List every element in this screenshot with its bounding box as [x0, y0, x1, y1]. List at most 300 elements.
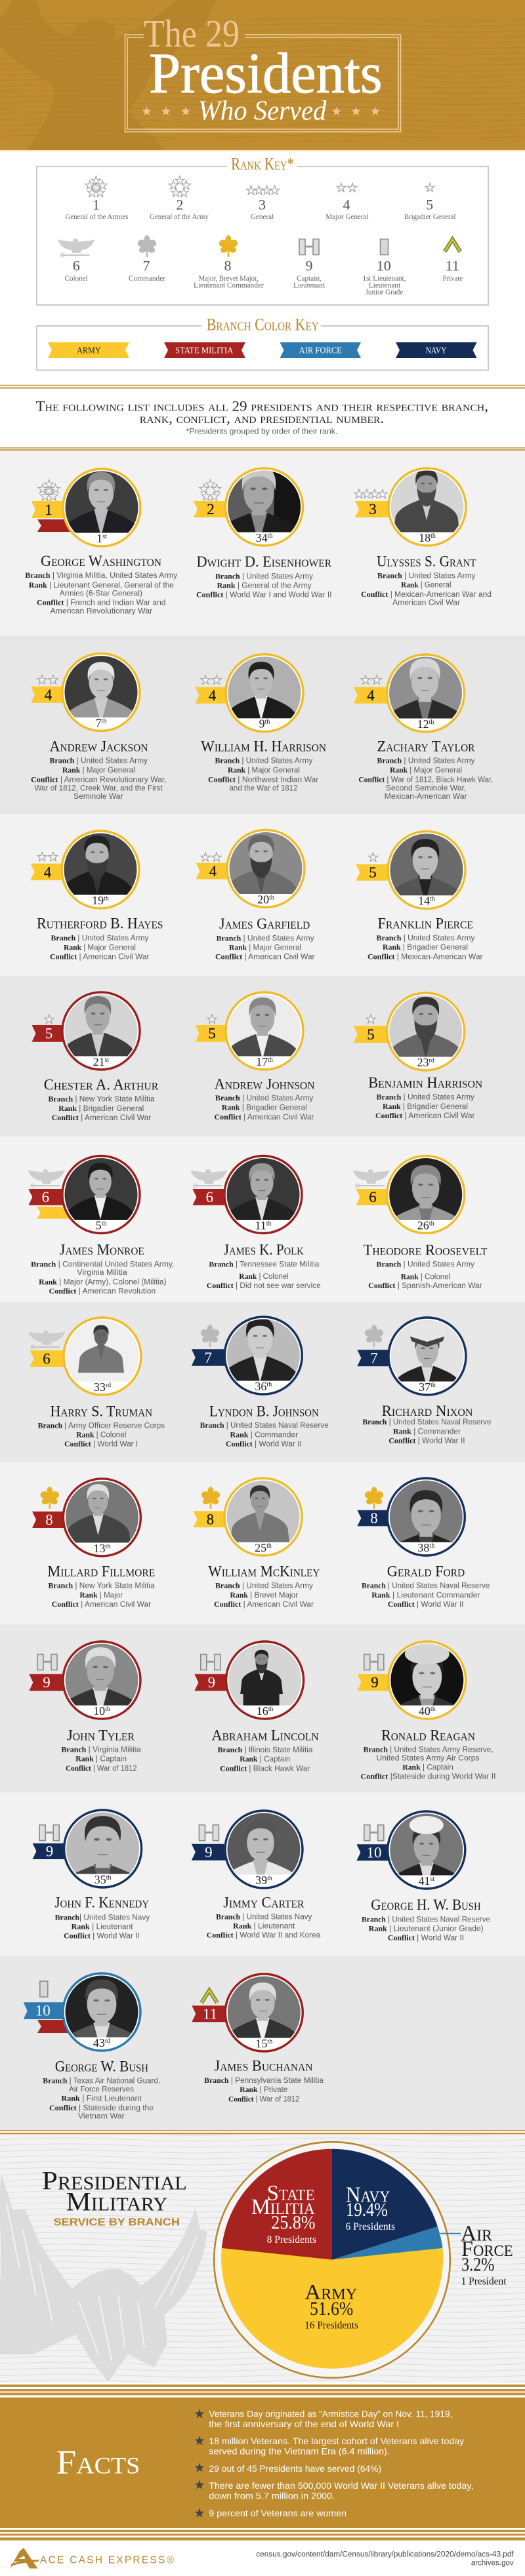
- card: Andrew Johnson: [196, 992, 315, 1121]
- rank 8: 8: [224, 258, 231, 274]
- air force ribbon: [280, 342, 361, 358]
- name: Benjamin Harrison: [368, 1075, 483, 1091]
- state militia ribbon: STATE MILITIA: [175, 346, 234, 355]
- portrait: [224, 1478, 303, 1556]
- details: [361, 1746, 496, 1781]
- details: Conflict | American Civil War: [214, 1114, 314, 1121]
- details: Rank | Lieutenant Commander: [371, 1592, 480, 1600]
- details: Conflict | War of 1812: [228, 2095, 299, 2103]
- card: John Tyler: [29, 1641, 146, 1773]
- rank 8: [194, 235, 264, 290]
- portrait: th: [265, 719, 270, 726]
- heading: facts: Facts: [56, 2444, 140, 2482]
- rank 2: [150, 176, 209, 221]
- rank oak leaf: [201, 1486, 220, 1508]
- branch ribbon: [357, 1350, 392, 1367]
- portrait: 33: [94, 1380, 106, 1394]
- details: Rank | Colonel: [76, 1432, 126, 1439]
- details: [361, 572, 492, 607]
- card: Gerald Ford: [357, 1478, 490, 1609]
- details: Rank | Brigadier General: [58, 1105, 144, 1113]
- details: Conflict | American Civil War: [50, 954, 150, 961]
- name: Abraham Lincoln: [211, 1727, 319, 1743]
- details: Conflict | French and Indian War and: [37, 599, 165, 607]
- details: Rank | Lieutenant: [72, 1923, 133, 1931]
- portrait: 10: [93, 1704, 105, 1718]
- details: [358, 757, 493, 801]
- details: Branch | United States Army: [51, 935, 149, 942]
- portrait: [386, 992, 466, 1072]
- branch ribbon: [355, 501, 392, 517]
- portrait: th: [266, 1220, 272, 1228]
- rank 4: 4: [343, 197, 350, 212]
- pie chart: [214, 2142, 513, 2378]
- portrait: th: [267, 2038, 272, 2045]
- portrait: [386, 653, 466, 733]
- details: Branch | New York State Militia: [49, 1582, 155, 1590]
- intro text: *Presidents grouped by order of their rank.: [186, 428, 337, 436]
- rank star: [207, 1015, 217, 1024]
- details: Rank | Major: [79, 1592, 123, 1600]
- card: Ulysses S. Grant: [354, 468, 492, 607]
- panel: rank key: [37, 155, 488, 305]
- rank 2: General of the Army: [150, 212, 209, 221]
- branch ribbon: [32, 1512, 67, 1528]
- portrait: [388, 468, 467, 546]
- portrait: [62, 1478, 141, 1557]
- portrait: th: [430, 1706, 436, 1713]
- portrait: 16: [257, 1704, 268, 1718]
- details: [368, 1261, 482, 1290]
- details: Conflict | World War I and World War II: [196, 591, 332, 599]
- card: James Buchanan: [192, 1973, 324, 2103]
- label: air force: [440, 2222, 513, 2287]
- intro text: [36, 398, 488, 436]
- fact 1: the first anniversary of the end of World War I: [209, 2419, 399, 2429]
- portrait: 43: [93, 2036, 105, 2049]
- portrait: th: [104, 895, 109, 902]
- rank 1: [66, 176, 129, 221]
- details: [200, 1422, 329, 1449]
- branch ribbon: [30, 1350, 66, 1367]
- details: Conflict | American Civil War: [52, 1114, 151, 1122]
- portrait: 34: [256, 531, 268, 544]
- label: state militia: [251, 2181, 316, 2245]
- name: Lyndon B. Johnson: [209, 1403, 319, 1419]
- title stars: [142, 106, 380, 115]
- portrait: th: [268, 1706, 273, 1713]
- details: Branch | Virginia Militia: [61, 1746, 141, 1754]
- portrait: 23: [417, 1056, 429, 1069]
- branch ribbon: 7: [205, 1350, 212, 1366]
- panel: facts: [0, 2385, 525, 2541]
- name: George H. W. Bush: [371, 1897, 481, 1913]
- details: American Civil War: [392, 599, 460, 607]
- portrait: [54, 1641, 146, 1743]
- details: [362, 1419, 491, 1445]
- branch ribbon: [193, 1511, 228, 1528]
- details: Conflict | World War I: [64, 1441, 138, 1449]
- label: state militia: State: [267, 2181, 315, 2205]
- details: Conflict | World War II: [388, 1934, 464, 1942]
- footer sources: archives.gov: [471, 2559, 514, 2567]
- portrait: th: [429, 1542, 434, 1550]
- details: Branch| United States Navy: [55, 1914, 150, 1922]
- details: [204, 2077, 324, 2103]
- portrait: rd: [106, 1382, 111, 1389]
- name: John F. Kennedy: [54, 1895, 150, 1911]
- rank stars: [361, 675, 381, 684]
- details: Branch | United States Army Reserve,: [364, 1746, 494, 1754]
- name: James Garfield: [219, 916, 310, 932]
- details: Conflict | Mexican-American War and: [361, 591, 492, 599]
- card: Lyndon B. Johnson: [192, 1316, 329, 1449]
- branch ribbon: 8: [207, 1511, 214, 1528]
- name: Gerald Ford: [387, 1563, 465, 1579]
- details: Conflict | War of 1812, Black Hawk War,: [358, 776, 493, 784]
- branch ribbon: 4: [45, 687, 52, 703]
- rank stars: [201, 675, 221, 684]
- title: Who Served: Who Served: [198, 96, 327, 127]
- intro text: rank, conflict, and presidential number.: [140, 410, 384, 426]
- portrait: 12: [417, 717, 429, 731]
- card: Jimmy Carter: [192, 1810, 321, 1939]
- rank stars: [37, 853, 58, 861]
- details: American Revolutionary War: [50, 607, 152, 615]
- details: Branch | United States Army: [215, 757, 313, 765]
- portrait: th: [267, 1875, 272, 1882]
- branch ribbon: [31, 687, 66, 703]
- portrait: th: [430, 896, 435, 903]
- details: Branch | United States Naval Reserve: [362, 1916, 490, 1923]
- rank 1: 1: [93, 197, 100, 212]
- label: air force: 3.2%: [461, 2254, 495, 2276]
- rank star: [45, 1015, 54, 1024]
- rank 1: General of the Armies: [66, 212, 129, 221]
- details: United States Army Air Corps: [377, 1754, 480, 1762]
- portrait: [384, 1811, 469, 1914]
- portrait: [223, 1156, 303, 1244]
- details: Conflict | World War II: [388, 1437, 465, 1445]
- fact 2: served during the Vietnam Era (6.4 million).: [209, 2446, 390, 2457]
- details: [43, 2078, 160, 2121]
- air force ribbon: AIR FORCE: [299, 346, 342, 355]
- branch ribbon: [192, 1844, 228, 1861]
- heading: rank key: Rank Key*: [231, 155, 294, 173]
- details: [368, 935, 483, 961]
- details: [61, 1746, 141, 1773]
- rank eagle: [28, 1169, 65, 1188]
- card: Dwight D. Eisenhower: [194, 467, 332, 599]
- branch ribbon: 4: [209, 687, 217, 704]
- fact 4: There are fewer than 500,000 World War II Veterans alive today,: [209, 2480, 473, 2491]
- branch ribbons: [28, 1189, 72, 1218]
- card: Chester A. Arthur: [32, 992, 159, 1122]
- details: Conflict | American Civil War: [52, 1601, 151, 1609]
- details: Branch | United States Army: [377, 572, 476, 580]
- branch ribbon: 6: [369, 1189, 377, 1205]
- rank star: [368, 853, 378, 862]
- branch ribbon: 2: [207, 501, 215, 517]
- card: James Monroe: [28, 1156, 174, 1296]
- details: Conflict | World War II: [388, 1601, 464, 1609]
- rank star: [366, 1015, 375, 1024]
- details: Air Force Reserves: [69, 2085, 134, 2093]
- card: William H. Harrison: [196, 654, 326, 792]
- portrait: [226, 829, 306, 909]
- portrait: [224, 1316, 303, 1396]
- portrait: [215, 1810, 306, 1915]
- heading: presidential military: SERVICE BY BRANCH: [54, 2217, 180, 2228]
- portrait: th: [105, 1706, 110, 1713]
- details: Conflict | World War II and Korea: [207, 1931, 321, 1939]
- branch ribbon: 9: [371, 1674, 379, 1691]
- portrait: 26: [417, 1218, 429, 1232]
- name: Zachary Taylor: [377, 738, 475, 754]
- footer sources: [256, 2551, 514, 2567]
- details: Branch | United States Army: [50, 757, 148, 765]
- branch ribbon: [196, 863, 230, 879]
- card: Ronald Reagan: [357, 1641, 496, 1781]
- branch ribbons: 6: [42, 1189, 49, 1205]
- rank 10: 1st Lieutenant,: [363, 273, 406, 283]
- details: Conflict | Black Hawk War: [220, 1765, 310, 1773]
- details: [214, 1582, 314, 1609]
- rank oak leaf: [365, 1325, 383, 1347]
- portrait: [62, 652, 141, 732]
- branch ribbon: 6: [43, 1351, 51, 1367]
- card: Benjamin Harrison: [354, 992, 483, 1120]
- branch ribbon: 6: [206, 1189, 213, 1205]
- details: Branch | United States Army: [377, 1261, 474, 1269]
- rank 10: [363, 239, 406, 296]
- branch ribbon: [196, 687, 230, 704]
- eagle watermark: [0, 2174, 207, 2382]
- portrait: 19: [92, 894, 104, 907]
- details: [362, 1916, 490, 1942]
- portrait: 18: [419, 531, 430, 544]
- rank 7: 7: [143, 258, 150, 274]
- portrait: 20: [257, 893, 269, 906]
- title: The 29: The 29: [144, 12, 240, 55]
- rank 4: [326, 183, 369, 221]
- fact 5: 9 percent of Veterans are women: [209, 2508, 346, 2518]
- portrait: rd: [429, 1057, 434, 1064]
- details: Rank | Lieutenant: [233, 1922, 295, 1930]
- details: Rank | Lieutenant General, General of the: [29, 582, 174, 590]
- rank 10: 10: [377, 258, 391, 274]
- name: William McKinley: [208, 1563, 320, 1579]
- details: [218, 1746, 313, 1773]
- details: Conflict | World War II: [64, 1933, 140, 1941]
- label: army: Army: [304, 2280, 357, 2304]
- fact 2: [195, 2436, 464, 2457]
- rank 9: Lieutenant: [293, 281, 326, 290]
- rank bars: [199, 1825, 219, 1841]
- portrait: 21: [93, 1055, 105, 1068]
- branch ribbon: [356, 1844, 392, 1861]
- details: [31, 1260, 174, 1296]
- details: Rank | Major General: [390, 767, 462, 775]
- rank stars: [38, 479, 60, 500]
- rank 2: 2: [176, 197, 184, 212]
- details: Branch | New York State Militia: [49, 1096, 155, 1104]
- name: Richard Nixon: [382, 1403, 473, 1419]
- details: Branch | United States Army: [377, 1094, 474, 1102]
- details: Conflict | World War II: [226, 1441, 302, 1449]
- branch ribbon: 4: [44, 864, 52, 880]
- rank 4: Major General: [326, 212, 369, 221]
- portrait: 11: [255, 1218, 266, 1232]
- rank bars: [39, 1825, 59, 1841]
- fact 2: 18 million Veterans. The largest cohort of Veterans alive today: [209, 2436, 464, 2446]
- branch ribbon: 3: [369, 501, 377, 517]
- details: [215, 935, 315, 961]
- portrait: 25: [255, 1541, 266, 1554]
- label: army: [304, 2280, 358, 2331]
- details: [49, 1096, 155, 1122]
- portrait: th: [102, 717, 106, 725]
- card: Rutherford B. Hayes: [30, 830, 163, 961]
- name: Harry S. Truman: [50, 1403, 153, 1419]
- name: George Washington: [41, 553, 161, 569]
- rank 5: 5: [426, 197, 433, 212]
- card: James Garfield: [196, 829, 315, 961]
- rank stars: [201, 853, 221, 862]
- branch ribbon: [196, 1025, 230, 1042]
- portrait: th: [430, 1382, 436, 1389]
- details: Conflict | Northwest Indian War: [208, 776, 319, 784]
- details: [196, 573, 332, 599]
- name: James K. Polk: [224, 1241, 304, 1258]
- details: Conflict |Stateside during World War II: [361, 1773, 496, 1781]
- card: George Washington: [25, 468, 178, 615]
- footer logo: [10, 2548, 175, 2568]
- branch ribbon: 9: [43, 1674, 51, 1691]
- label: navy: [345, 2183, 395, 2232]
- branch ribbon: [33, 1843, 68, 1860]
- details: [214, 1095, 314, 1121]
- portrait: st: [430, 1876, 434, 1883]
- details: Rank | Brigadier General: [383, 944, 468, 952]
- panel: service by branch: [0, 2135, 525, 2383]
- fact 4: [195, 2480, 473, 2501]
- rank bars: [37, 1654, 57, 1670]
- portrait: [58, 830, 140, 917]
- branch ribbon: [354, 1026, 390, 1043]
- details: [25, 572, 178, 615]
- details: Branch | Tennessee State Militia: [209, 1261, 320, 1269]
- portrait: [62, 991, 141, 1071]
- branch ribbon: [30, 864, 66, 880]
- name: Chester A. Arthur: [44, 1077, 159, 1093]
- rank oak leaf: [41, 1486, 59, 1508]
- details: War of 1812, Creek War, and the First: [35, 784, 163, 792]
- label: state militia: Militia: [251, 2195, 315, 2219]
- card: George H. W. Bush: [356, 1811, 490, 1942]
- rank 11: Private: [442, 273, 463, 283]
- branch ribbon: 11: [203, 2005, 217, 2023]
- navy ribbon: [396, 342, 476, 358]
- portrait: [386, 1154, 466, 1234]
- panel: branch color key: [37, 315, 488, 370]
- fact 3: 29 out of 45 Presidents have served (64%): [209, 2463, 381, 2474]
- details: [362, 1582, 490, 1609]
- rank bars: [364, 1825, 384, 1841]
- state militia ribbon: [164, 342, 245, 358]
- portrait: [388, 1316, 467, 1396]
- details: Rank | Captain: [240, 1756, 290, 1763]
- portrait: 14: [418, 895, 430, 908]
- portrait: [63, 1317, 142, 1396]
- rank 3: General: [251, 212, 274, 221]
- details: Branch | United States Army: [215, 1582, 313, 1590]
- portrait: 1: [96, 532, 102, 545]
- label: state militia: 25.8%: [271, 2211, 316, 2233]
- portrait: th: [429, 719, 434, 726]
- details: Rank | Brigadier General: [222, 1104, 307, 1112]
- rank 5: [404, 183, 456, 221]
- name: George W. Bush: [55, 2058, 148, 2074]
- details: [31, 757, 167, 801]
- details: Branch | United States Army: [215, 1095, 314, 1102]
- branch ribbons: 1: [45, 502, 52, 518]
- card: Theodore Roosevelt: [353, 1156, 488, 1290]
- details: Branch | Pennsylvania State Militia: [204, 2077, 324, 2085]
- name: James Buchanan: [214, 2058, 313, 2074]
- details: Conflict | American Civil War: [214, 1601, 314, 1609]
- branch ribbon: 4: [367, 687, 375, 704]
- portrait: 39: [255, 1874, 267, 1887]
- card: Millard Fillmore: [32, 1478, 155, 1609]
- branch ribbons: [32, 501, 72, 532]
- details: Branch | Illinois State Militia: [218, 1746, 313, 1754]
- branch ribbon: 5: [45, 1026, 52, 1041]
- branch ribbon: [356, 1189, 390, 1205]
- heading: branch color key: Branch Color Key: [207, 315, 319, 334]
- details: Rank | First Lieutenant: [61, 2095, 142, 2103]
- details: Armies (6-Star General): [60, 590, 142, 598]
- details: Rank | Commander: [393, 1428, 461, 1436]
- fact 4: down from 5.7 million in 2000.: [209, 2491, 335, 2501]
- portrait: st: [102, 533, 107, 540]
- heading: presidential military: Presidential: [42, 2165, 187, 2195]
- portrait: 5: [96, 1218, 102, 1232]
- label: navy: Navy: [346, 2183, 390, 2207]
- details: [375, 1094, 475, 1120]
- rank eagle: [190, 1169, 227, 1188]
- portrait: [377, 1641, 476, 1755]
- branch ribbon: [357, 1674, 392, 1691]
- navy ribbon: NAVY: [425, 346, 446, 355]
- portrait: 13: [94, 1542, 106, 1555]
- intro text: The following list includes all 29 presidents and their respective branch,: [36, 398, 488, 414]
- rank eagle: [28, 1331, 65, 1349]
- rank 3: [246, 186, 280, 221]
- rank 11: 11: [446, 258, 459, 274]
- branch ribbon: 9: [208, 1674, 215, 1691]
- heading: presidential military: Military: [66, 2187, 167, 2217]
- branch ribbon: [194, 501, 230, 517]
- rank bar: [40, 1981, 48, 1997]
- details: Virginia Militia: [77, 1269, 127, 1277]
- portrait: th: [430, 533, 436, 540]
- rank 9: Captain,: [297, 273, 322, 283]
- details: Rank | Commander: [230, 1431, 298, 1439]
- branch ribbon: 8: [45, 1512, 53, 1528]
- portrait: [226, 1641, 304, 1720]
- footer sources: census.gov/content/dam/Census/library/publications/2020/demo/acs-43.pdf: [256, 2551, 514, 2559]
